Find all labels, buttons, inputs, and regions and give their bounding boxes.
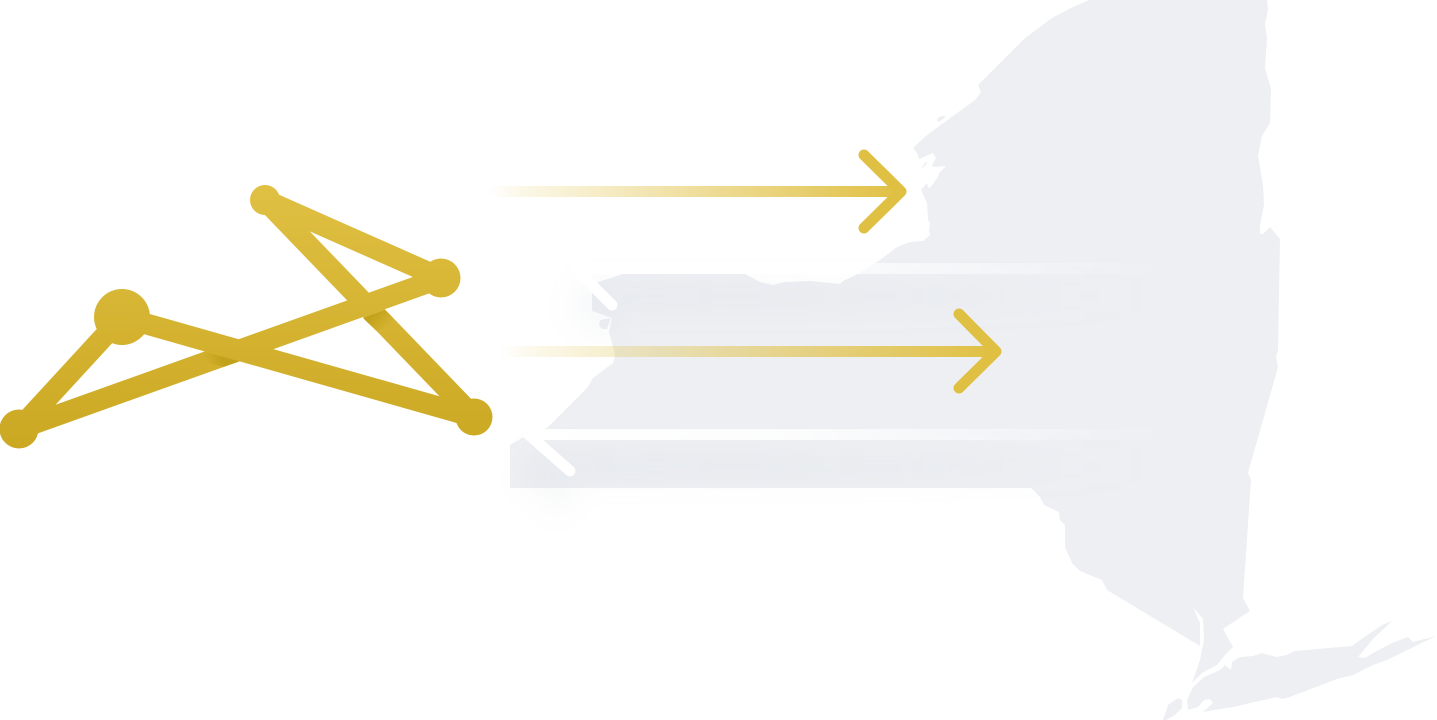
soft shadow beneath white arrows — [528, 296, 1150, 503]
arrow head — [864, 155, 901, 228]
link: large node to lower left node — [19, 317, 122, 429]
arrow shaft — [528, 429, 1165, 440]
map: small island east — [922, 162, 928, 168]
arrow head — [528, 396, 570, 471]
node: lower right — [456, 398, 492, 436]
node: right — [422, 258, 460, 298]
map: Long Island — [1187, 621, 1436, 712]
node: large left — [94, 289, 150, 345]
shadow: upper white arrow — [576, 296, 1150, 332]
shadow: lower white arrow — [528, 466, 1150, 503]
map: New York State silhouette — [510, 0, 1436, 720]
arrow: lower gold arrow pointing east — [498, 314, 996, 388]
link: lower left node to right node — [19, 278, 441, 429]
arrow shaft — [498, 346, 992, 357]
link: large node to lower right node — [122, 317, 474, 417]
arrow shaft — [576, 263, 1166, 274]
link: top node to lower right node — [265, 200, 474, 417]
network graph — [0, 185, 492, 448]
arrow: upper gold arrow pointing east — [488, 155, 901, 228]
node: lower left — [0, 410, 38, 448]
arrow: lower white arrow pointing west — [528, 396, 1165, 471]
arrow shaft — [488, 186, 898, 197]
crossing shadow on long link — [188, 352, 240, 367]
link: top node to right node — [265, 200, 441, 278]
crossing shadow on top link — [363, 310, 398, 331]
arrow: upper white arrow pointing west — [576, 233, 1166, 305]
map: Staten Island — [1163, 698, 1182, 720]
map: small island west — [599, 318, 611, 329]
arrow head — [576, 233, 612, 305]
map: mainland — [510, 0, 1280, 683]
map: small island north — [937, 116, 946, 122]
node: top — [250, 185, 280, 215]
arrow head — [959, 314, 996, 388]
